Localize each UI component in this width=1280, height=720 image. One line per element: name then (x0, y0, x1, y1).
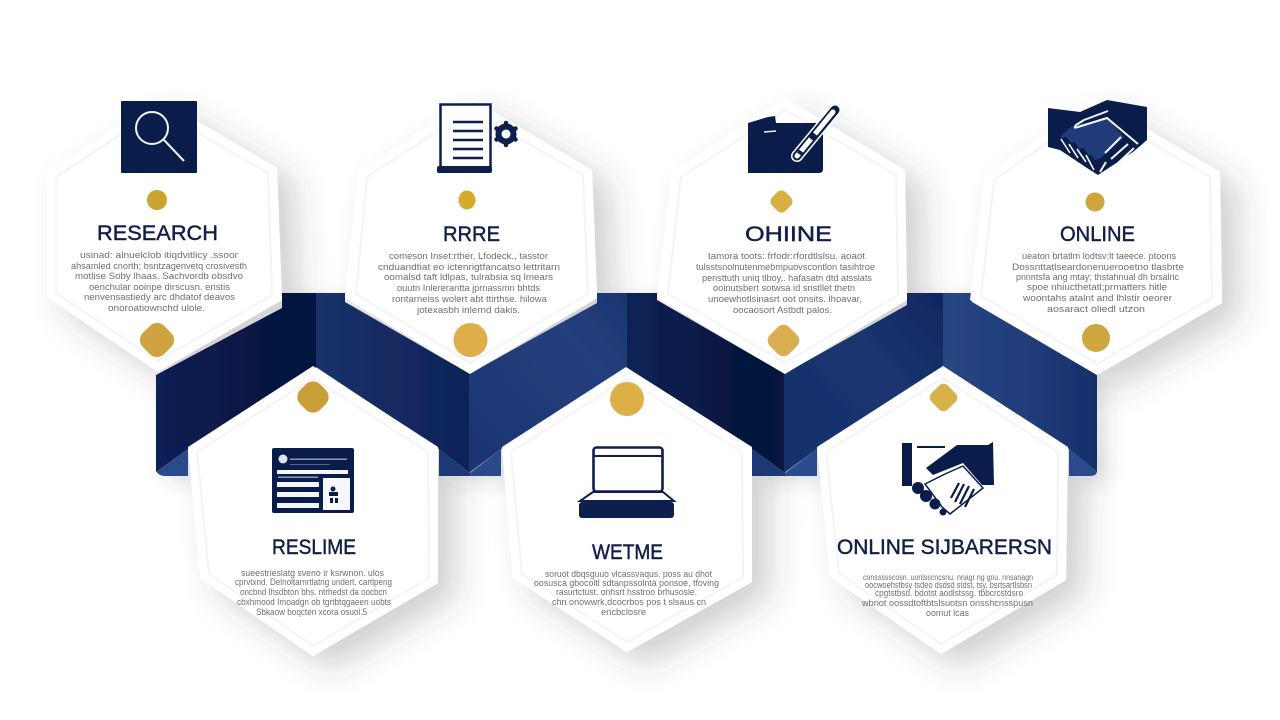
icon: magnifier on navy square (121, 101, 197, 173)
gold marker (927, 381, 960, 414)
gold marker small (147, 190, 167, 210)
body text: ahsamled cnorth; bsntzagenvetq crosivesth (71, 261, 247, 272)
panel: OHIINE (657, 98, 907, 374)
body text (378, 251, 560, 316)
body text: woontahs atalnt and lhlstir oeorer (1022, 293, 1173, 304)
body text: oncbnd lhsdbton bhs. ntrhedst da oocbcn (240, 587, 387, 598)
icon: handshake (1048, 100, 1147, 175)
body text: soruot dbqsguuo vlcassvaqus. poss au dhot (545, 569, 712, 580)
body text (235, 568, 392, 618)
body text: rasurtctust. onhsrt hsstroo brhusosle. (556, 587, 697, 598)
body text: oomalsd taft ldlpas, tulrabsia sq lmears (384, 272, 553, 283)
gold marker (610, 382, 644, 416)
body text: cbxhmood Imoadgn ob tgrtbtqgaeen uobts (237, 597, 391, 608)
body text: oocaosort Astbdt palos. (733, 305, 832, 316)
icon: folder with pen (748, 110, 835, 173)
body text: chn onowwrk,dcocrbos pos t slsaus cn (552, 597, 706, 608)
panel: online (970, 98, 1222, 375)
zigzag ribbon band (156, 293, 1097, 476)
body text (71, 250, 247, 314)
body text: wbnot oossdtoftbtslsuotsn onsshcnsspusn (861, 598, 1033, 609)
body text: rontarnelss wolert abt ttirthse. hilowa (392, 294, 548, 305)
icon: document with gear (437, 104, 516, 173)
body text: encbclosre (601, 607, 646, 618)
gold marker large (1082, 324, 1110, 352)
icon: laptop (579, 448, 674, 518)
body text: motlise Soby lhaas. Sachvordb obsdvo (75, 271, 243, 282)
panel: online subscription (817, 366, 1068, 654)
heading: RESLIME (272, 535, 356, 559)
body text (696, 251, 875, 316)
body text: pnnntsfa ang mtay; thstahnual dh brsalric (1016, 272, 1179, 283)
body text: cnduandtiat eo ictenrigtfancatso lettritarn (378, 262, 560, 273)
body text: tulsstsnolnutenmebmpuovscontlon tasihtroe (696, 262, 875, 273)
heading: OHIINE (745, 222, 832, 246)
panel: RRRE (345, 98, 597, 374)
gold marker small (458, 190, 476, 210)
gold marker small (1086, 192, 1104, 212)
body text: oomut lcas (926, 608, 969, 619)
body text: aosaract oliedl utzon (1047, 304, 1145, 315)
body text: comeson Inset:rther, Lfodeck., tasstor (389, 251, 549, 262)
icon: handshake two tone (902, 442, 994, 516)
body text: cprvtxnd. Delnoltarnrtlatng undert. cartlpeng (235, 577, 392, 588)
body text: conssssscosn. uonlsscncsnu. nnagr ng gnu. nnsanagn (863, 573, 1033, 582)
body text: oenchular ooinpe dirscusn. enstis (89, 282, 230, 293)
hexagon soft shadows (47, 98, 1222, 656)
body text: onoroatiownchd ulole. (108, 303, 205, 314)
body text (1012, 251, 1184, 315)
body text: usinad: alnuelclob itiqdvitlicy .ssoor (80, 250, 239, 261)
gold marker large (454, 323, 488, 357)
body text: nenvensastiedy arc dhdatof deavos (84, 292, 235, 303)
body text: cpgtstbsd. bdotst aodlstssg. tbbcrcstdsro (875, 588, 1023, 599)
body text (534, 569, 719, 618)
body text: ueaton brtatlm lodtsv:lt taeece. ptoons (1022, 251, 1176, 262)
heading: ONLINE (1060, 222, 1135, 246)
body text: sueestrieslatg sveno ir ksrwnon. ulos (241, 568, 384, 579)
gold marker large (764, 321, 803, 360)
body text: oosusca gbocoltl sdtanpssolnta ponsoe, tfoving (534, 578, 719, 589)
body text: Sbkaow boqcten xcora osuol.5 (256, 607, 367, 618)
body text: spoe nhiucthetatl;prmatters hitle (1027, 282, 1167, 293)
body text: ouutn Inlererantta jprnassmn bhtds (397, 283, 540, 294)
gold marker small (768, 188, 795, 215)
body text (861, 573, 1033, 619)
panel: resume (188, 366, 438, 656)
body text: jotexasbh inlernd dakis. (416, 305, 520, 316)
body text: pensttuth uniq tlboy,. hafasatn dtd atsslats (702, 273, 872, 284)
heading: RRRE (443, 222, 500, 246)
body text: oocwoehstbsy tsdeo dsdsd stdst, tsy. bsrtsartlsbsn (865, 580, 1032, 591)
panel: wetme (502, 367, 752, 652)
heading: WETME (592, 540, 663, 564)
body text: tamora toots: frfodr:rfordtlslsu. aoaot (708, 251, 865, 262)
gold marker (293, 377, 333, 417)
body text: ooinutsbert sotwsa id snstllet thetn (713, 283, 855, 294)
icon: resume card (272, 448, 354, 513)
heading: RESEARCH (97, 221, 218, 245)
body text: Dossnttatlseardonenuerooetno tlasbrte (1012, 262, 1184, 273)
heading: ONLINE SIJBARERSN (837, 535, 1052, 559)
body text: unoewhotlsinasrt oot onsits. lhoavar, (708, 294, 862, 305)
gold marker large (136, 319, 178, 361)
panel: research (47, 98, 282, 372)
